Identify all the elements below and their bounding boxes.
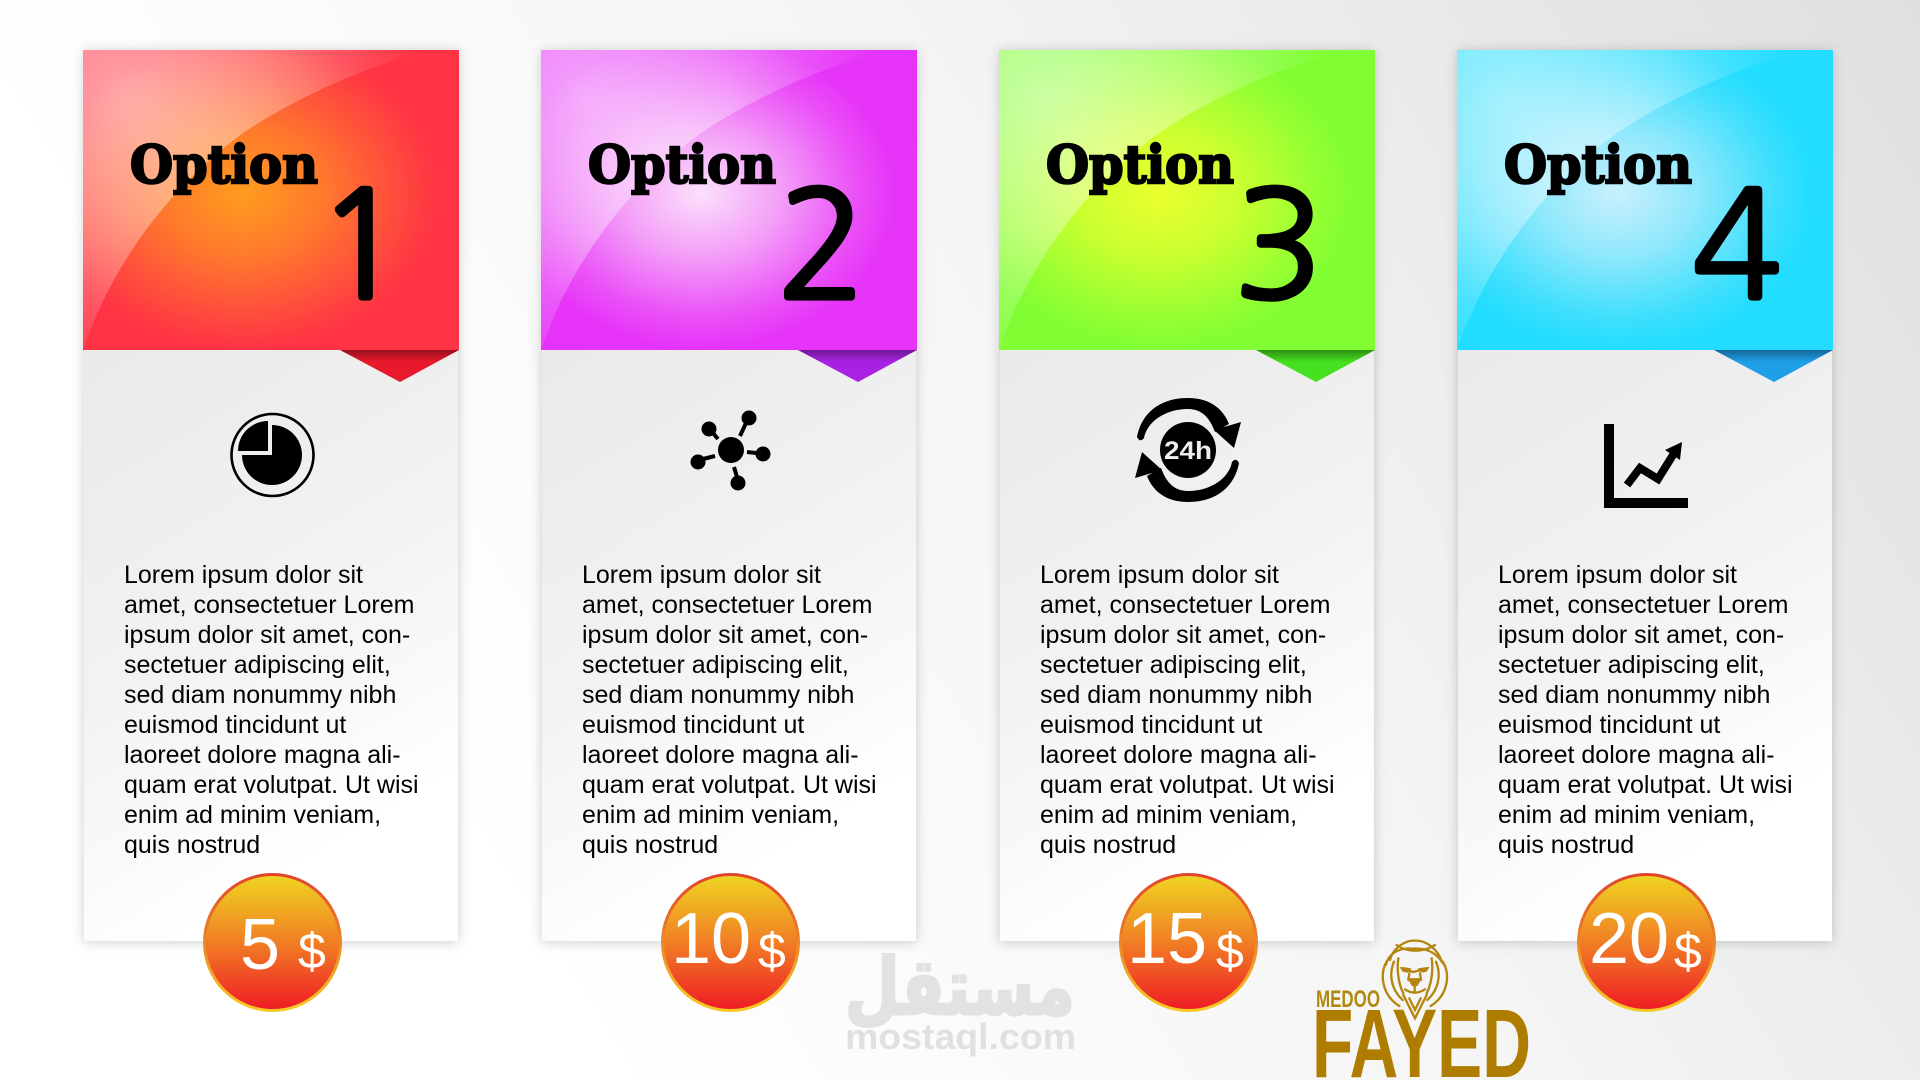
panel: option 4	[1457, 50, 1833, 1010]
body text 2: Lorem ipsum dolor sit	[582, 561, 821, 589]
logo: Medoo Fayed	[1312, 941, 1531, 1080]
watermark url: mostaql.com	[845, 1016, 1076, 1057]
body text 4: quam erat volutpat. Ut wisi	[1498, 771, 1793, 799]
body text 1: sectetuer adipiscing elit,	[124, 651, 391, 679]
body text 4: ipsum dolor sit amet, con-	[1498, 621, 1784, 649]
body text 4: sectetuer adipiscing elit,	[1498, 651, 1765, 679]
heading: option: Option	[588, 135, 776, 196]
card body	[1458, 50, 1832, 941]
price badge 20: 20	[1589, 899, 1669, 979]
body text 1: quam erat volutpat. Ut wisi	[124, 771, 419, 799]
price badge 10	[662, 874, 798, 1010]
price badge 15: $	[1216, 923, 1244, 979]
body text 2: ipsum dolor sit amet, con-	[582, 621, 868, 649]
body text 4: euismod tincidunt ut	[1498, 711, 1720, 739]
body text 2: quis nostrud	[582, 831, 718, 859]
icon: lion head	[1383, 941, 1447, 1018]
heading: option: Option	[130, 135, 318, 196]
body text 3: quam erat volutpat. Ut wisi	[1040, 771, 1335, 799]
body text 3: amet, consectetuer Lorem	[1040, 591, 1330, 619]
body text 3: euismod tincidunt ut	[1040, 711, 1262, 739]
body text 1: ipsum dolor sit amet, con-	[124, 621, 410, 649]
header banner 3	[999, 50, 1375, 382]
panel: option 1	[83, 50, 459, 1010]
body text 1: Lorem ipsum dolor sit	[124, 561, 363, 589]
body text 3: enim ad minim veniam,	[1040, 801, 1297, 829]
body text 2: euismod tincidunt ut	[582, 711, 804, 739]
body text 4: Lorem ipsum dolor sit	[1498, 561, 1737, 589]
price badge 5	[204, 874, 340, 1010]
header banner 4	[1457, 50, 1833, 382]
body text 4: laoreet dolore magna ali-	[1498, 741, 1775, 769]
header banner 2	[541, 50, 917, 382]
body text 3: laoreet dolore magna ali-	[1040, 741, 1317, 769]
header banner 1	[83, 50, 459, 382]
body text 2: sed diam nonummy nibh	[582, 681, 854, 709]
watermark: mostaql	[845, 943, 1076, 1057]
body text 3: ipsum dolor sit amet, con-	[1040, 621, 1326, 649]
body text 1: sed diam nonummy nibh	[124, 681, 396, 709]
heading number 3: 3	[1234, 172, 1324, 320]
body text 4: enim ad minim veniam,	[1498, 801, 1755, 829]
body text 1: amet, consectetuer Lorem	[124, 591, 414, 619]
body text 2: amet, consectetuer Lorem	[582, 591, 872, 619]
body text 2: sectetuer adipiscing elit,	[582, 651, 849, 679]
price badge 5: $	[298, 923, 326, 979]
body text 1: enim ad minim veniam,	[124, 801, 381, 829]
icon: line chart	[1604, 424, 1688, 508]
panel: option 3	[999, 50, 1375, 1010]
card body	[1000, 50, 1374, 941]
body text 2: laoreet dolore magna ali-	[582, 741, 859, 769]
icon: network nodes	[690, 410, 770, 490]
card body	[542, 50, 916, 941]
body text 1: euismod tincidunt ut	[124, 711, 346, 739]
body text 1: laoreet dolore magna ali-	[124, 741, 401, 769]
heading: option: Option	[1504, 135, 1692, 196]
price badge 20	[1578, 874, 1714, 1010]
icon: pie chart	[232, 414, 314, 496]
body text 4: amet, consectetuer Lorem	[1498, 591, 1788, 619]
panel: option 2	[541, 50, 917, 1010]
card body	[84, 50, 458, 941]
icon: 24h cycle: 24h	[1164, 437, 1212, 465]
price badge 15: 15	[1127, 899, 1207, 979]
body text 4: sed diam nonummy nibh	[1498, 681, 1770, 709]
logo wordmark medoo: MEDOO	[1316, 986, 1380, 1013]
price badge 10: 10	[671, 899, 751, 979]
price badge 10: $	[758, 923, 786, 979]
body text 3: sectetuer adipiscing elit,	[1040, 651, 1307, 679]
heading: option: Option	[1046, 135, 1234, 196]
heading number 4: 4	[1692, 172, 1782, 320]
watermark arabic wordmark: مستقل	[845, 943, 1075, 1033]
heading number 1: 1	[316, 172, 406, 320]
heading number 2: 2	[777, 172, 867, 320]
body text 3: Lorem ipsum dolor sit	[1040, 561, 1279, 589]
body text 2: quam erat volutpat. Ut wisi	[582, 771, 877, 799]
body text 3: sed diam nonummy nibh	[1040, 681, 1312, 709]
body text 3: quis nostrud	[1040, 831, 1176, 859]
body text 2: enim ad minim veniam,	[582, 801, 839, 829]
price badge 15	[1120, 874, 1256, 1010]
body text 1: quis nostrud	[124, 831, 260, 859]
price badge 5: 5	[240, 905, 280, 985]
body text 4: quis nostrud	[1498, 831, 1634, 859]
icon: 24h cycle	[1135, 398, 1241, 502]
price badge 20: $	[1674, 923, 1702, 979]
